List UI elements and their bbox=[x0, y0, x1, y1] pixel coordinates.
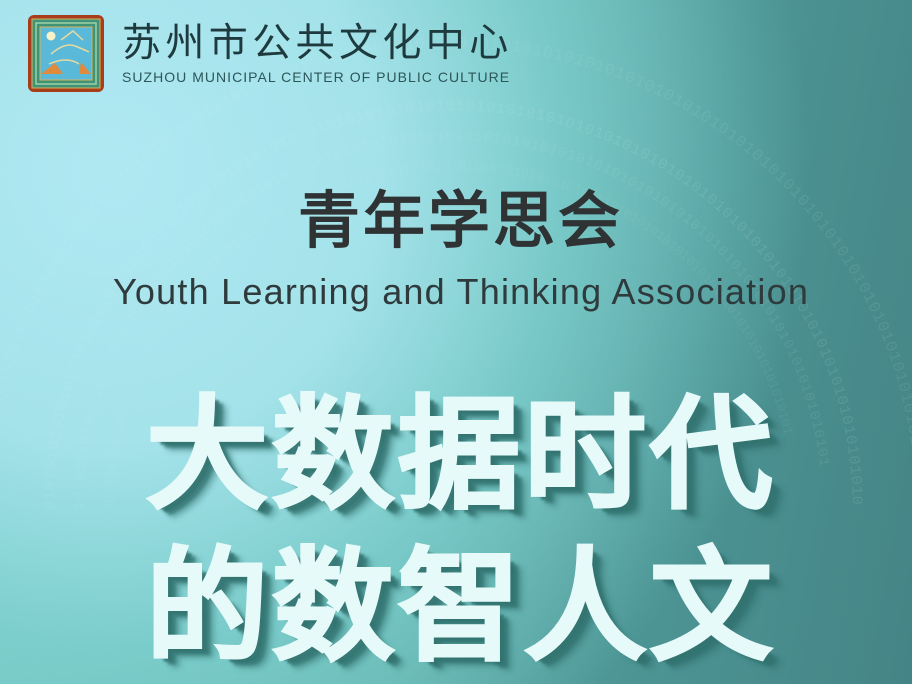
background binary rings: 01010101010101010101010101010101010101010101010101010101010101010101010101010101010101010101010101010101010101010101010101010101 bbox=[480, 102, 863, 504]
heading: association name: 青年学思会 bbox=[298, 170, 623, 260]
logo chinese name: 苏州市公共文化中心 bbox=[122, 12, 513, 68]
main title line 1: 大数据时代 bbox=[146, 356, 776, 533]
subheading: english association name: Youth Learning and Thinking Association bbox=[113, 271, 809, 312]
main title line 2: 的数智人文 bbox=[146, 508, 776, 684]
logo emblem bbox=[28, 15, 104, 92]
logo english name: SUZHOU MUNICIPAL CENTER OF PUBLIC CULTURE bbox=[122, 69, 510, 85]
background binary rings: 1010101010101010101010101010101010101010101010101010101010101010101010101010101010101010101010101010101010101010101010101010101 bbox=[681, 251, 792, 434]
background binary rings: 10101010101010101010101010101010101010101010101010101010101010101010101010101010101010101010101010101010101010101010101 bbox=[554, 148, 829, 466]
